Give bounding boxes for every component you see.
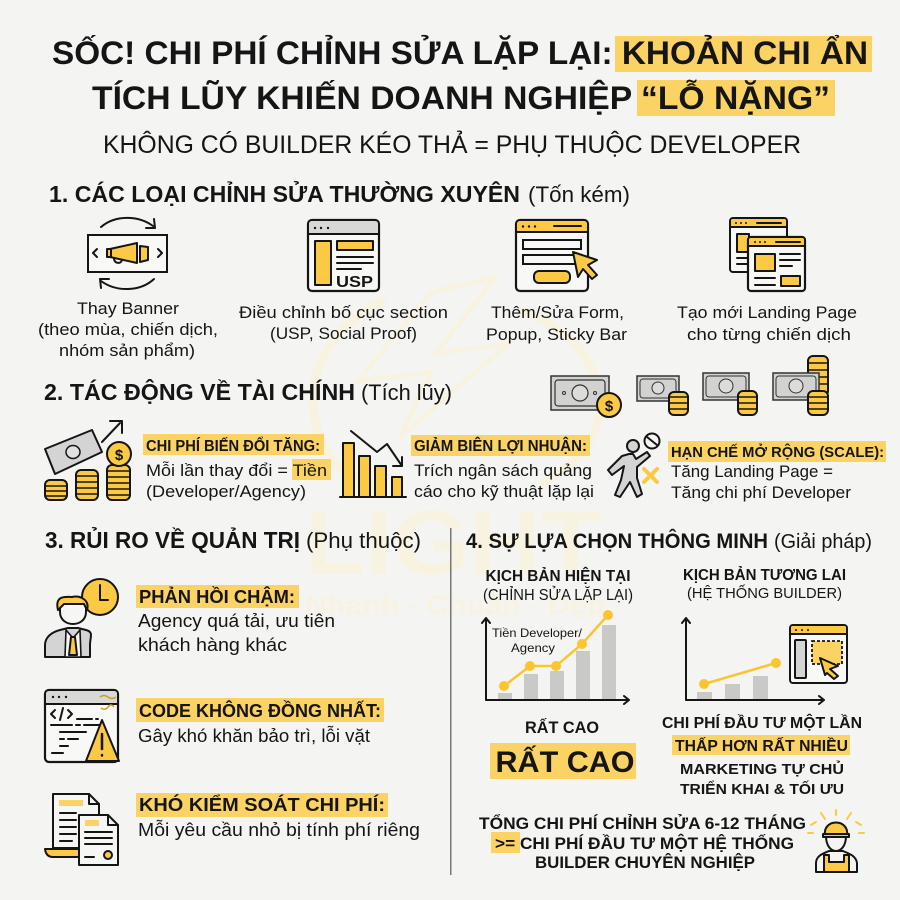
heading [483, 566, 633, 604]
chart: current scenario: Tiền Developer/ [492, 626, 583, 640]
heading: section 4: 4. SỰ LỰA CHỌN THÔNG MINH [466, 529, 768, 553]
chart: future scenario [682, 618, 824, 704]
heading: KỊCH BẢN HIỆN TẠI [486, 566, 630, 585]
panel: chi phi bien doi tang [45, 421, 331, 501]
caption [677, 303, 857, 344]
icon: USP layout: USP [336, 274, 373, 291]
caption: cho từng chiến dịch [687, 325, 851, 344]
caption: Điều chỉnh bố cục section [239, 303, 448, 322]
text block: Agency quá tải, ưu tiên [138, 611, 335, 631]
caption: Thêm/Sửa Form, [491, 303, 624, 322]
text block [143, 434, 331, 501]
icon: builder window [790, 625, 847, 683]
icon: falling bars [340, 431, 406, 497]
icon: money growth row [551, 356, 828, 417]
panel: han che mo rong [608, 434, 886, 502]
text block: CHI PHÍ ĐẦU TƯ MỘT LẦN [662, 713, 862, 732]
text block [136, 585, 335, 655]
text block [136, 793, 420, 840]
heading: KỊCH BẢN TƯƠNG LAI [683, 565, 846, 584]
heading [683, 565, 846, 602]
conclusion text: BUILDER CHUYÊN NGHIỆP [535, 853, 755, 872]
conclusion text [479, 814, 806, 872]
panel: landing page [677, 218, 857, 344]
text block: (Developer/Agency) [146, 482, 306, 501]
heading: section 3 [45, 525, 421, 553]
icon: money and coins [45, 421, 131, 500]
panel: kich ban hien tai [482, 566, 636, 779]
text block: GIẢM BIÊN LỢI NHUẬN: [414, 437, 587, 455]
text block: HẠN CHẾ MỞ RỘNG (SCALE): [671, 443, 884, 461]
text block: Mỗi yêu cầu nhỏ bị tính phí riêng [138, 819, 420, 840]
text block [668, 441, 886, 502]
text block: Gây khó khăn bảo trì, lỗi vặt [138, 725, 370, 746]
panel: kho kiem soat chi phi [45, 793, 420, 865]
panel: phan hoi cham [45, 579, 335, 657]
text block: CODE KHÔNG ĐỒNG NHẤT: [139, 700, 381, 721]
heading: section 1: 1. CÁC LOẠI CHỈNH SỬA THƯỜNG XUYÊN [49, 179, 520, 207]
text block: Mỗi lần thay đổi = Tiền [146, 461, 327, 480]
icon: money growth row: $ [605, 398, 614, 415]
caption: nhóm sản phẩm) [59, 341, 195, 360]
watermark logo: LIGHT [305, 492, 601, 594]
title: SỐC! CHI PHÍ CHỈNH SỬA LẶP LẠI: KHOẢN CHI ẨN [52, 35, 868, 71]
chart: current scenario: Agency [511, 641, 555, 655]
heading: section 3: 3. RỦI RO VỀ QUẢN TRỊ [45, 525, 300, 553]
icon: code warning [45, 690, 119, 762]
text block: KHÓ KIỂM SOÁT CHI PHÍ: [139, 794, 385, 815]
text block: MARKETING TỰ CHỦ [680, 760, 844, 778]
text block: Tăng chi phí Developer [671, 483, 851, 502]
icon: invoices [45, 794, 118, 865]
heading: section 2: (Tích lũy) [361, 380, 452, 405]
callout: very high: RẤT CAO [496, 745, 634, 779]
icon: construction worker [808, 810, 864, 872]
caption [38, 299, 218, 360]
panel: them sua form [486, 220, 627, 344]
chart: current scenario [482, 610, 629, 704]
icon: banner [88, 218, 167, 289]
text block [662, 713, 862, 798]
icon: person and clock [45, 579, 118, 657]
title [52, 35, 872, 116]
text block [136, 698, 384, 746]
label: very high: RẤT CAO [525, 718, 599, 737]
icon: money and coins: $ [115, 447, 124, 464]
icon: form with cursor [516, 220, 597, 291]
text block: THẤP HƠN RẤT NHIỀU [675, 736, 848, 755]
text block [411, 435, 594, 501]
watermark logo [305, 278, 605, 620]
heading: section 1: (Tốn kém) [528, 182, 630, 207]
heading: (HỆ THỐNG BUILDER) [687, 584, 842, 602]
heading: section 2: 2. TÁC ĐỘNG VỀ TÀI CHÍNH [44, 378, 355, 405]
panel: giam bien loi nhuan [340, 431, 594, 501]
heading: section 3: (Phụ thuộc) [306, 528, 421, 553]
text block: TRIỂN KHAI & TỐI ƯU [680, 780, 844, 798]
caption: Thay Banner [77, 299, 179, 318]
caption: (theo mùa, chiến dịch, [38, 320, 218, 339]
panel: thay banner [38, 218, 218, 360]
icon: USP layout [308, 220, 379, 291]
text block: CHI PHÍ BIẾN ĐỔI TĂNG: [146, 437, 320, 455]
text block: PHẢN HỒI CHẬM: [139, 586, 295, 607]
heading: section 4: (Giải pháp) [774, 531, 872, 553]
panel: kich ban tuong lai [662, 565, 862, 798]
icon: landing pages [730, 218, 805, 291]
panel: dieu chinh bo cuc [239, 220, 448, 343]
caption [239, 303, 448, 343]
caption [486, 303, 627, 344]
panel: code khong dong nhat [45, 690, 384, 762]
text block: Trích ngân sách quảng [414, 461, 592, 480]
subtitle: KHÔNG CÓ BUILDER KÉO THẢ = PHỤ THUỘC DEVELOPER [103, 129, 801, 159]
conclusion text: TỔNG CHI PHÍ CHỈNH SỬA 6-12 THÁNG [479, 814, 806, 833]
heading: (CHỈNH SỬA LẶP LẠI) [483, 585, 633, 604]
caption: (USP, Social Proof) [270, 324, 417, 343]
caption: Popup, Sticky Bar [486, 325, 627, 344]
caption: Tạo mới Landing Page [677, 303, 857, 322]
text block: cáo cho kỹ thuật lặp lại [414, 482, 594, 501]
title: TÍCH LŨY KHIẾN DOANH NGHIỆP “LỖ NẶNG” [92, 80, 830, 116]
watermark logo: Nhanh - Chuẩn - Đẹp [305, 590, 605, 620]
icon: blocked runner [608, 434, 660, 497]
text block: khách hàng khác [138, 635, 287, 655]
conclusion text: >= CHI PHÍ ĐẦU TƯ MỘT HỆ THỐNG [495, 833, 794, 853]
text block: Tăng Landing Page = [671, 462, 833, 481]
